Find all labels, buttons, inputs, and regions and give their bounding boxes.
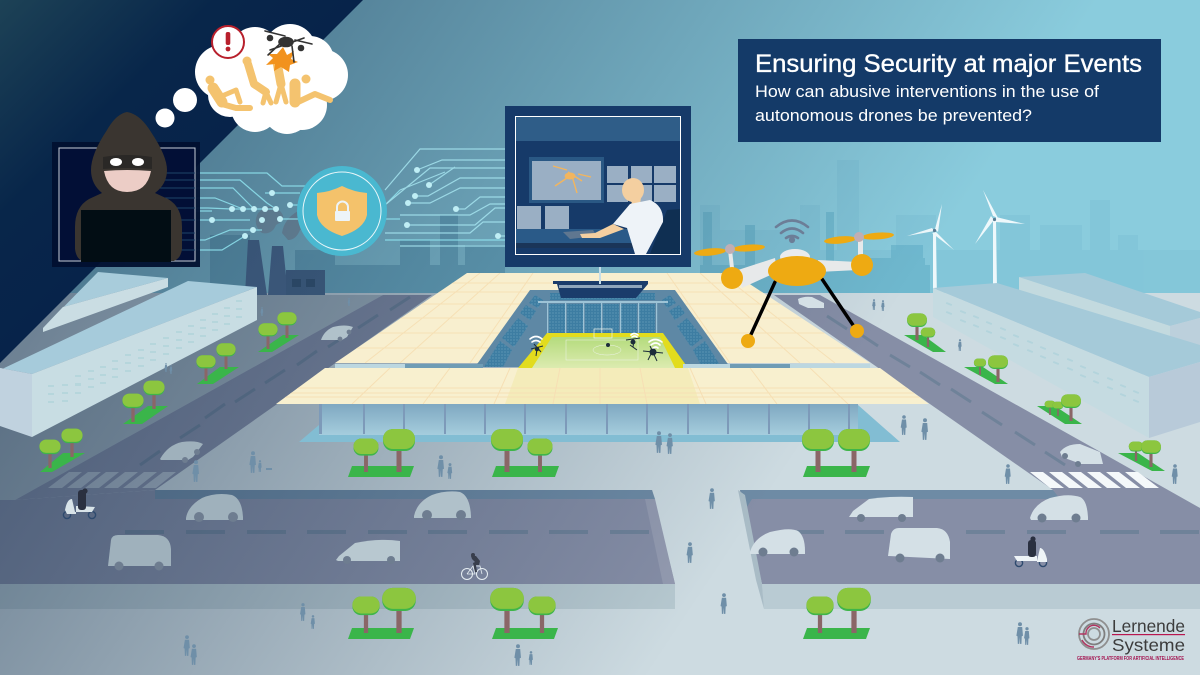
stadium base plinth — [299, 405, 900, 442]
hacker figure — [75, 112, 182, 262]
thought bubble — [156, 24, 348, 134]
left rear building — [43, 272, 168, 332]
right crosswalk — [1030, 472, 1159, 488]
trees along bottom plaza — [348, 588, 871, 639]
lower right road kerb — [740, 490, 1060, 510]
scooter right — [1014, 536, 1047, 567]
stadium roof front section — [270, 368, 935, 404]
Lernende Systeme logo: Systeme — [1112, 635, 1185, 655]
scooter left — [63, 488, 96, 519]
subtitle: How can abusive interventions in the use of — [755, 82, 1099, 101]
left front building — [0, 281, 257, 437]
left sidewalk band — [0, 295, 383, 500]
road lane dashes — [140, 297, 1065, 465]
chair — [650, 209, 680, 254]
alert icon — [212, 26, 244, 58]
hacker panel — [52, 112, 200, 267]
pedestrians — [165, 298, 1178, 666]
Lernende Systeme logo — [1077, 616, 1185, 662]
control room panel — [505, 106, 691, 267]
stadium roof gap strip — [335, 364, 870, 368]
circuit traces left of shield — [160, 173, 505, 250]
title: Ensuring Security at major Events — [755, 50, 1142, 78]
cyclist — [462, 553, 488, 580]
wifi signals over pitch — [530, 334, 662, 348]
left diagonal road — [15, 295, 432, 500]
drone motors and feet — [721, 254, 873, 348]
operator — [580, 178, 663, 254]
right rear building — [1019, 273, 1200, 345]
right front building — [933, 283, 1200, 438]
dark diagonal backdrop — [0, 0, 363, 363]
lower left road — [0, 490, 675, 584]
lower left road edge strip — [645, 499, 675, 584]
stadium grandstand canopy — [553, 267, 648, 298]
monitor wall — [517, 157, 676, 229]
sky background — [0, 0, 1200, 300]
injured figures — [213, 62, 330, 108]
city skyline — [210, 160, 1200, 295]
stadium roof rear section — [335, 273, 870, 363]
cars on roads — [108, 297, 1103, 566]
trees along left road — [39, 312, 299, 472]
lower road dashes — [125, 530, 1199, 534]
left crosswalk — [48, 472, 176, 488]
stadium glass facade — [319, 404, 858, 435]
lower left verge — [0, 584, 675, 609]
small drones over pitch — [531, 338, 663, 361]
drone rotors — [694, 231, 894, 257]
big orange drone — [694, 220, 894, 348]
drone arms — [728, 240, 863, 288]
wifi icon — [776, 220, 808, 242]
explosion — [266, 47, 298, 72]
stadium seating bowl — [475, 290, 730, 367]
drone body — [768, 256, 826, 286]
circuit nodes left of shield — [209, 190, 293, 239]
circuit traces right of shield — [385, 149, 505, 246]
title panel: autonomous drones be prevented? — [755, 106, 1032, 125]
wind turbines — [907, 190, 1025, 300]
logo wordmark: Lernende — [1112, 616, 1185, 636]
title panel — [738, 39, 1161, 142]
factory with chimneys and smoke — [245, 206, 325, 295]
football pitch — [518, 329, 688, 368]
drone legs — [748, 279, 857, 341]
trees in front of stadium — [348, 429, 870, 477]
right diagonal road — [774, 295, 1200, 530]
drone dome — [780, 249, 810, 265]
shield icon — [297, 166, 387, 256]
trees along right road — [904, 313, 1165, 471]
desk — [516, 229, 636, 248]
lower left road kerb — [155, 490, 655, 499]
ground plaza — [0, 293, 1200, 675]
car wheels — [114, 330, 1081, 570]
drone in thought — [265, 31, 312, 62]
circuit nodes right of shield — [404, 167, 501, 239]
lower right road — [740, 490, 1200, 584]
lower right verge — [762, 584, 1200, 609]
logo maze mark — [1079, 619, 1109, 649]
